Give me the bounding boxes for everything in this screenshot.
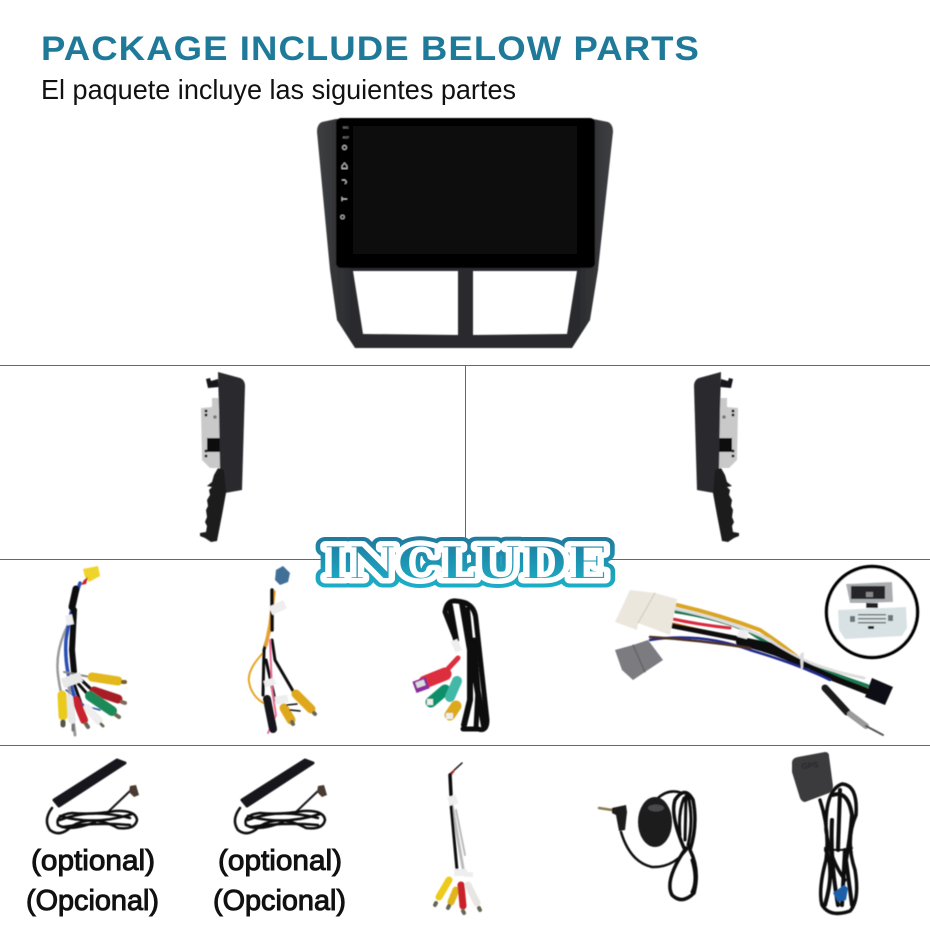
black strap xyxy=(207,438,222,452)
white socket xyxy=(838,607,907,639)
yellow USB xyxy=(450,706,456,715)
frame xyxy=(317,119,613,348)
side buttons xyxy=(341,126,349,219)
black sheath xyxy=(267,699,273,729)
jack xyxy=(599,808,612,810)
white tag xyxy=(451,639,462,653)
head unit front view xyxy=(317,118,613,348)
black core bundle xyxy=(740,642,866,690)
AV output cable xyxy=(435,763,480,913)
RCA harness with yellow connector xyxy=(57,566,125,735)
grey connector xyxy=(615,640,663,680)
white connector xyxy=(615,590,677,635)
microphone xyxy=(599,791,696,900)
opcional caption right: (Opcional) xyxy=(213,885,346,917)
head unit left side view xyxy=(200,372,245,542)
red USB xyxy=(425,674,445,682)
tags xyxy=(447,795,458,806)
white tags xyxy=(737,629,749,639)
divider lines xyxy=(0,365,930,746)
screen bezel xyxy=(336,118,595,268)
INCLUDE banner heading: INCLUDE xyxy=(323,536,608,590)
RCA plugs xyxy=(439,880,449,897)
opcional caption left: (Opcional) xyxy=(26,885,159,917)
green USB xyxy=(431,690,445,702)
cable xyxy=(621,832,690,867)
INCLUDE banner heading: INCLUDE xyxy=(323,536,608,590)
RCA harness with blue connector xyxy=(249,566,315,733)
teal USB xyxy=(450,681,457,697)
cable coil xyxy=(820,784,857,913)
black sheath xyxy=(72,589,76,607)
blue connector xyxy=(833,885,848,902)
white tags xyxy=(65,614,74,626)
screen xyxy=(353,126,577,254)
yellow connector xyxy=(83,566,100,582)
head unit right side view xyxy=(694,372,739,542)
4G antenna right xyxy=(235,760,327,833)
blue connector xyxy=(275,566,290,585)
USB cable xyxy=(412,601,487,730)
grey plug xyxy=(846,582,893,603)
wires xyxy=(677,605,868,688)
4G antenna left xyxy=(47,760,139,833)
optional caption left: (optional) xyxy=(31,845,155,877)
GPS antenna xyxy=(792,752,857,913)
RCA plugs xyxy=(92,677,118,681)
mic body xyxy=(638,797,672,847)
antenna plug xyxy=(825,688,847,712)
RCA plugs xyxy=(296,694,311,709)
optional caption right: (optional) xyxy=(218,845,342,877)
title: PACKAGE INCLUDE BELOW PARTS xyxy=(41,30,700,68)
lower arm with teeth xyxy=(200,468,226,542)
GPS antenna: GPS xyxy=(801,760,819,771)
side buttons: MIC xyxy=(343,126,349,130)
INCLUDE banner heading: INCLUDE xyxy=(323,536,608,590)
black connector xyxy=(865,678,893,705)
silver bracket xyxy=(201,398,222,468)
connector detail inset xyxy=(826,566,918,658)
top stub xyxy=(206,378,219,388)
subtitle: El paquete incluye las siguientes partes xyxy=(41,74,516,105)
side buttons: RST xyxy=(343,136,349,140)
wiring harness xyxy=(615,590,893,735)
body xyxy=(218,372,245,493)
GPS puck xyxy=(792,752,833,802)
tags xyxy=(269,600,287,615)
coil xyxy=(445,601,487,730)
